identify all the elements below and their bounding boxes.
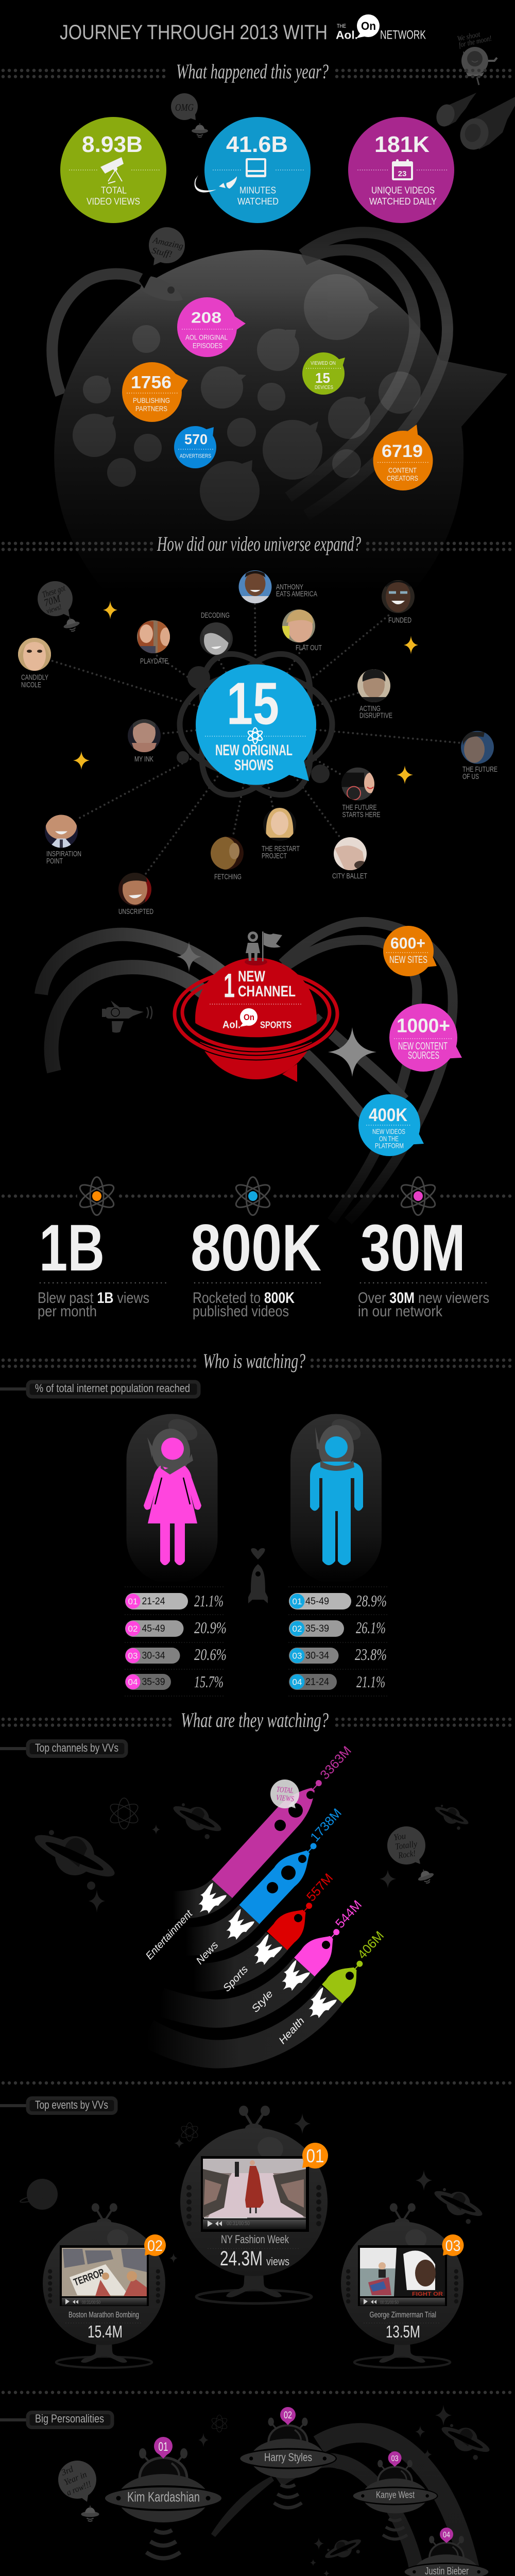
stat circle: total video views: 8.93B [82,132,143,157]
decorative: 70M views bubble: 70M [43,593,62,609]
heading: What are they watching?: What are they watching? [181,1708,329,1732]
rocket: Health 406M [277,1928,387,2046]
heading: What are they watching? [3,1708,515,1732]
show portraits [18,570,494,906]
female age list: 01 [128,1597,138,1606]
label pill: % of total internet population reached: % of total internet population reached [35,1382,190,1395]
exhaust trails [147,1889,332,2054]
tv: Boston Marathon Bombing: 15.4M [88,2322,123,2341]
male age list: 28.9% [356,1591,387,1610]
show labels: OF US [462,772,479,781]
portrait: Anthony Eats America [239,570,272,606]
portrait: The Future of Us [461,731,494,764]
rocket: Style 544M [250,1897,365,2015]
female age list [125,1587,227,1696]
show labels: THE RESTART [262,844,300,853]
stat: 1B: Blew past 1B views [38,1290,149,1307]
male age list: 35-39 [305,1623,329,1634]
decorative planets, stars and Rock bubble: Rock! [397,1848,416,1860]
show labels: ANTHONY [276,583,303,591]
tv: NY Fashion Week: 24.3M [220,2247,263,2270]
stat circle: minutes watched: WATCHED [237,196,279,207]
rocket: Style 544M: Style [250,1988,276,2015]
female age list: 03 [128,1651,138,1661]
rocket: Entertainment 3363M: 3363M [317,1743,354,1782]
callout: 400K new videos [358,1094,424,1156]
logo: Aol On Network [336,14,426,42]
planet rings [288,232,448,515]
callout: 6719 content creators: CREATORS [387,474,418,482]
show labels: MY INK [134,755,153,764]
male age list: 45-49 [305,1596,329,1607]
tv: Boston Marathon Bombing: 00:31/00:50 [82,2300,100,2305]
callout: 570 advertisers: 570 [184,431,208,447]
callout: 6719 content creators [373,425,433,490]
portrait: Unscripted [118,873,151,906]
stat: 30M: in our network [358,1303,443,1320]
tv: Boston Marathon Bombing: Boston Marathon Bombing [68,2311,139,2319]
decorative planets, stars and Rock bubble: You [393,1831,406,1842]
callout: 208 AOL original episodes: 208 [191,309,221,327]
icon: rocket swoosh [195,175,237,193]
callout: 3rd year in a row: a row!!! [65,2479,93,2498]
male age list: 26.1% [356,1618,386,1637]
callout: 1756 publishing partners [122,362,188,422]
callout: 400K new videos: PLATFORM [375,1142,404,1150]
stat: 1B: per month [38,1303,97,1320]
logo: Aol On Network: NETWORK [380,28,426,42]
female age list: 35-39 [142,1676,165,1688]
photo: protest: FIGHT OR [412,2291,443,2297]
stat: 30M: 30M [360,1211,466,1285]
callout: 1756 publishing partners: PUBLISHING [133,396,170,404]
ufo: Harry Styles: Harry Styles [264,2451,312,2464]
callout: 570 advertisers [174,426,216,468]
logo: Aol On Network: Aol. [336,29,358,41]
show labels: THE FUTURE [342,803,377,812]
badge 03: 03 [445,2238,460,2255]
show labels: ACTING [359,704,381,713]
icon: atom [247,727,264,744]
stat: 800K: Rocketed to 800K [193,1290,295,1307]
callout: viewed on 15 devices [302,352,345,395]
tv: George Zimmerman Trial [341,2203,464,2368]
photo: protest [360,2248,445,2297]
stat circle: unique videos watched daily: 181K [374,132,430,157]
rocket: Health 406M: 406M [355,1928,387,1962]
show labels: FETCHING [214,873,242,881]
show labels [21,583,497,916]
ufo: Harry Styles: 02 [284,2410,292,2421]
icon: telescope [100,157,124,183]
mascot: robot with note: for the moon! [458,35,492,49]
male age list: 01 [293,1597,302,1606]
male age list: 23.8% [355,1645,387,1664]
stat circle: unique videos watched daily: WATCHED DAILY [369,196,437,207]
rocket: News 1738M: 1738M [307,1806,345,1844]
show labels: FLAT OUT [296,643,322,652]
show labels: EATS AMERICA [276,589,317,599]
decorative: Amazing Stuff bubble and crashed rocket [139,227,185,301]
callout: 400K new videos: NEW VIDEOS [372,1127,405,1136]
callout: 600+ new sites: 600+ [390,934,425,952]
male age list [289,1587,388,1696]
show labels: POINT [46,857,63,866]
red planet: 1 new channel Aol On Sports: 1 [224,967,235,1005]
callout: 1000+ new content sources [389,1004,462,1072]
decorative: meteors [434,93,515,154]
logo: Aol On Sports: On [244,1012,254,1022]
icon: rocket with heart [248,1548,268,1603]
ufo: Justin Bieber [403,2528,490,2576]
badge 02 [144,2234,166,2256]
female age list: 04 [128,1677,138,1687]
callout: 400K new videos: 400K [369,1105,407,1125]
male age list: 30-34 [305,1651,329,1661]
rocket: Style 544M: 544M [333,1897,365,1931]
portrait: Flat Out [282,609,315,642]
callout: viewed on 15 devices: 15 [315,370,330,386]
red planet: 1 new channel Aol On Sports: CHANNEL [238,983,296,1000]
stat circle: minutes watched [195,117,311,223]
stat: 800K: published videos [193,1303,289,1320]
label pill: % of total internet population reached [0,1382,199,1397]
portrait: My Ink [128,719,161,752]
male age list: 21-24 [305,1676,329,1688]
callout: 1000+ new content sources: NEW CONTENT [398,1041,448,1052]
heading: What happened this year? [3,60,515,83]
callout: 15 new original shows: 15 [227,670,279,737]
ufo: Kim Kardashian [104,2437,223,2558]
icon: calendar [392,159,413,180]
decorative planets, stars and Rock bubble [31,1798,470,1912]
astronaut with flag [245,931,282,965]
decorative: OMG bubble and ufo [171,93,208,137]
tv: Boston Marathon Bombing [43,2203,166,2368]
yellow stars [73,601,418,784]
photo: newspapers [62,2248,147,2296]
mascot: robot with note [457,30,497,85]
decorative: OMG bubble and ufo: OMG [175,102,194,113]
stat: 30M [358,1211,489,1320]
callout: total views [270,1780,299,1808]
badge 03 [442,2234,464,2256]
male age list: 02 [293,1624,302,1634]
callout: 6719 content creators: 6719 [382,442,423,461]
swooping grey bands around the red planet [41,922,453,1221]
title [60,14,426,44]
heading: Who is watching?: Who is watching? [203,1349,305,1372]
stat circle: unique videos watched daily [348,117,454,223]
ufo: Kanye West: 03 [391,2454,399,2463]
male age list: 21.1% [356,1672,385,1691]
stat circle: minutes watched: 41.6B [226,132,288,157]
mascot: robot with note: We shoot [457,30,482,43]
label pill: Big Personalities: Big Personalities [35,2412,104,2425]
callout: viewed on 15 devices: DEVICES [315,384,333,391]
tv: George Zimmerman Trial: George Zimmerman Trial [370,2311,436,2319]
grey stars and ray gun [102,941,376,1077]
stat: 800K [191,1211,323,1320]
connector lines from center to shows [51,603,461,876]
show labels: PLAYDATE [140,657,168,666]
stat: 1B: 1B [39,1211,105,1285]
callout: viewed on 15 devices: VIEWED ON [311,360,336,366]
female age list: 21-24 [142,1596,165,1607]
logo: Aol On Network: On [361,20,376,32]
tv: George Zimmerman Trial: 00:31/00:50 [380,2300,399,2305]
divider [3,2081,515,2084]
male age list: 03 [293,1651,302,1661]
callout: 15 new original shows: SHOWS [234,757,273,774]
female age list: 20.6% [194,1645,227,1664]
big speech bubble planet [52,232,507,662]
portrait: The Future Starts Here [341,768,376,801]
stat circle: minutes watched: MINUTES [239,185,276,196]
tv: George Zimmerman Trial: 13.5M [386,2322,420,2341]
logo: Aol On Sports: SPORTS [260,1020,291,1030]
decorative: 70M views bubble: views! [45,603,63,616]
callout: 208 AOL original episodes: AOL ORIGINAL [185,333,228,342]
portrait: Inspiration Point [45,813,78,848]
badge 01: 01 [306,2145,324,2166]
ufo: Kim Kardashian: Kim Kardashian [127,2489,200,2505]
female age list: 20.9% [194,1618,227,1637]
portrait: Fetching [211,837,244,870]
rocket: Sports 557M [221,1871,336,1994]
portrait: Candidly Nicole [18,638,51,671]
badge 02: 02 [147,2238,163,2255]
decorative: event stars and planets [20,2113,485,2263]
portrait: The Restart Project [263,808,296,842]
chart: rocket bars, top channels [144,1743,387,2054]
callout: 600+ new sites [383,926,437,976]
decorative planets, stars and Rock bubble: Totally [394,1839,418,1852]
decorative: Amazing Stuff bubble and crashed rocket: Amazing [151,235,184,251]
callout: 208 AOL original episodes [177,297,246,357]
ufo: Justin Bieber: 04 [443,2531,450,2539]
icon: ray gun [102,1001,152,1032]
decorative: 70M views bubble: These got [41,583,67,600]
callout: total views: VIEWS [276,1794,295,1804]
decorative: personalities stars and planets [198,2405,492,2576]
show labels: CANDIDLY [21,673,48,682]
callout: 1756 publishing partners: PARTNERS [135,404,167,413]
ufo: Harry Styles [239,2407,337,2508]
stat circle: total video views [60,117,166,223]
logo: Aol On Sports: Aol. [222,1019,241,1030]
red planet: 1 new channel Aol On Sports: NEW [238,968,266,985]
stat circle: total video views: VIDEO VIEWS [87,196,140,207]
show labels: CITY BALLET [332,872,367,880]
show labels: STARTS HERE [342,810,380,819]
female age list: 30-34 [142,1651,165,1661]
stat circle: total video views: TOTAL [101,185,127,196]
figure: female astronaut capsule [127,1414,217,1584]
ufo: Kanye West [352,2451,438,2539]
ufo: Kanye West: Kanye West [376,2490,415,2500]
label pill: Big Personalities [0,2412,112,2428]
decorative: Amazing Stuff bubble and crashed rocket: Stuff! [151,245,173,259]
title: JOURNEY THROUGH 2013 WITH [60,21,328,44]
logo: Aol On Network: THE [337,23,346,29]
small craters [73,274,421,521]
tv: NY Fashion Week: NY Fashion Week [221,2233,289,2246]
photo: runway [203,2159,306,2217]
female age list: 21.1% [194,1591,224,1610]
callout: 15 new original shows [196,665,316,785]
stat circle: unique videos watched daily: UNIQUE VIDEOS [371,185,435,196]
rocket: Entertainment 3363M [144,1743,354,1962]
heading: What happened this year?: What happened this year? [176,60,329,83]
callout: 6719 content creators: CONTENT [388,466,417,474]
show labels: DECODING [201,611,230,620]
rocket: Entertainment 3363M: Entertainment [144,1908,195,1962]
rocket: News 1738M: News [194,1939,220,1967]
show labels: DISRUPTIVE [359,711,392,720]
callout: 600+ new sites: NEW SITES [389,955,427,965]
callout: 400K new videos: ON THE [379,1134,399,1143]
callout: 3rd year in a row: 3rd [59,2464,75,2478]
divider with atoms [3,1177,515,1215]
male age list: 04 [293,1677,302,1687]
badge 01 [302,2143,328,2168]
label pill: Top events by VVs: Top events by VVs [35,2098,108,2111]
callout: 1000+ new content sources: SOURCES [408,1050,439,1061]
callout: 570 advertisers: ADVERTISERS [180,453,211,460]
heading: Who is watching? [3,1349,515,1372]
red planet: 1 new channel Aol On Sports [175,958,337,1082]
label pill: Top events by VVs [0,2098,116,2113]
show labels: THE FUTURE [462,765,497,774]
rocket: Sports 557M: 557M [304,1871,336,1904]
callout: 208 AOL original episodes: EPISODES [193,341,222,349]
decorative: 70M views bubble [38,581,81,633]
callout: 3rd year in a row: Year in [62,2469,88,2487]
divider [3,2391,515,2394]
stat: 1B [38,1211,168,1320]
callout: total views: TOTAL [276,1786,294,1795]
stat: 30M: Over 30M new viewers [358,1290,489,1307]
icon: calendar: 23 [398,170,406,178]
portrait: City Ballet [334,837,367,870]
callout: 3rd year in a row [58,2461,99,2521]
rocket: Health 406M: Health [277,2015,307,2046]
female age list: 45-49 [142,1623,165,1634]
portrait: Acting Disruptive [357,669,390,703]
photo: newspapers: TERROR [72,2267,106,2289]
tv: NY Fashion Week [180,2106,328,2303]
callout: 1000+ new content sources: 1000+ [397,1015,450,1037]
ufo: Kim Kardashian: 01 [159,2440,168,2454]
label pill: Top channels by VVs [0,1741,126,1756]
label pill: Top channels by VVs: Top channels by VVs [35,1741,118,1754]
rocket: News 1738M [194,1806,345,1967]
show labels: UNSCRIPTED [118,907,153,916]
show labels: PROJECT [262,852,287,860]
heading: How did our video universe expand?: How did our video universe expand? [157,532,361,555]
portrait: Funded [382,580,415,613]
callout: 1756 publishing partners: 1756 [131,373,171,393]
tv: NY Fashion Week: views [266,2255,289,2268]
background swoosh bands [112,2433,478,2576]
figure: male astronaut capsule [290,1414,382,1584]
show labels: FUNDED [388,616,411,625]
heading: How did our video universe expand? [3,532,515,555]
tv: NY Fashion Week: 00:31/00:50 [227,2221,250,2227]
female age list: 02 [128,1624,138,1634]
show labels: INSPIRATION [46,850,81,858]
stat: 800K: 800K [191,1211,321,1285]
atom behind the 15 bubble [177,636,333,813]
icon: tablet [246,158,266,177]
rocket: Sports 557M: Sports [221,1963,250,1994]
callout: 15 new original shows: NEW ORIGINAL [215,742,293,759]
show labels: NICOLE [21,681,41,689]
logo: Aol On Sports [222,1008,291,1030]
portrait: Decoding [200,622,233,655]
female age list: 15.7% [194,1672,224,1691]
portrait: Playdate [137,620,171,653]
